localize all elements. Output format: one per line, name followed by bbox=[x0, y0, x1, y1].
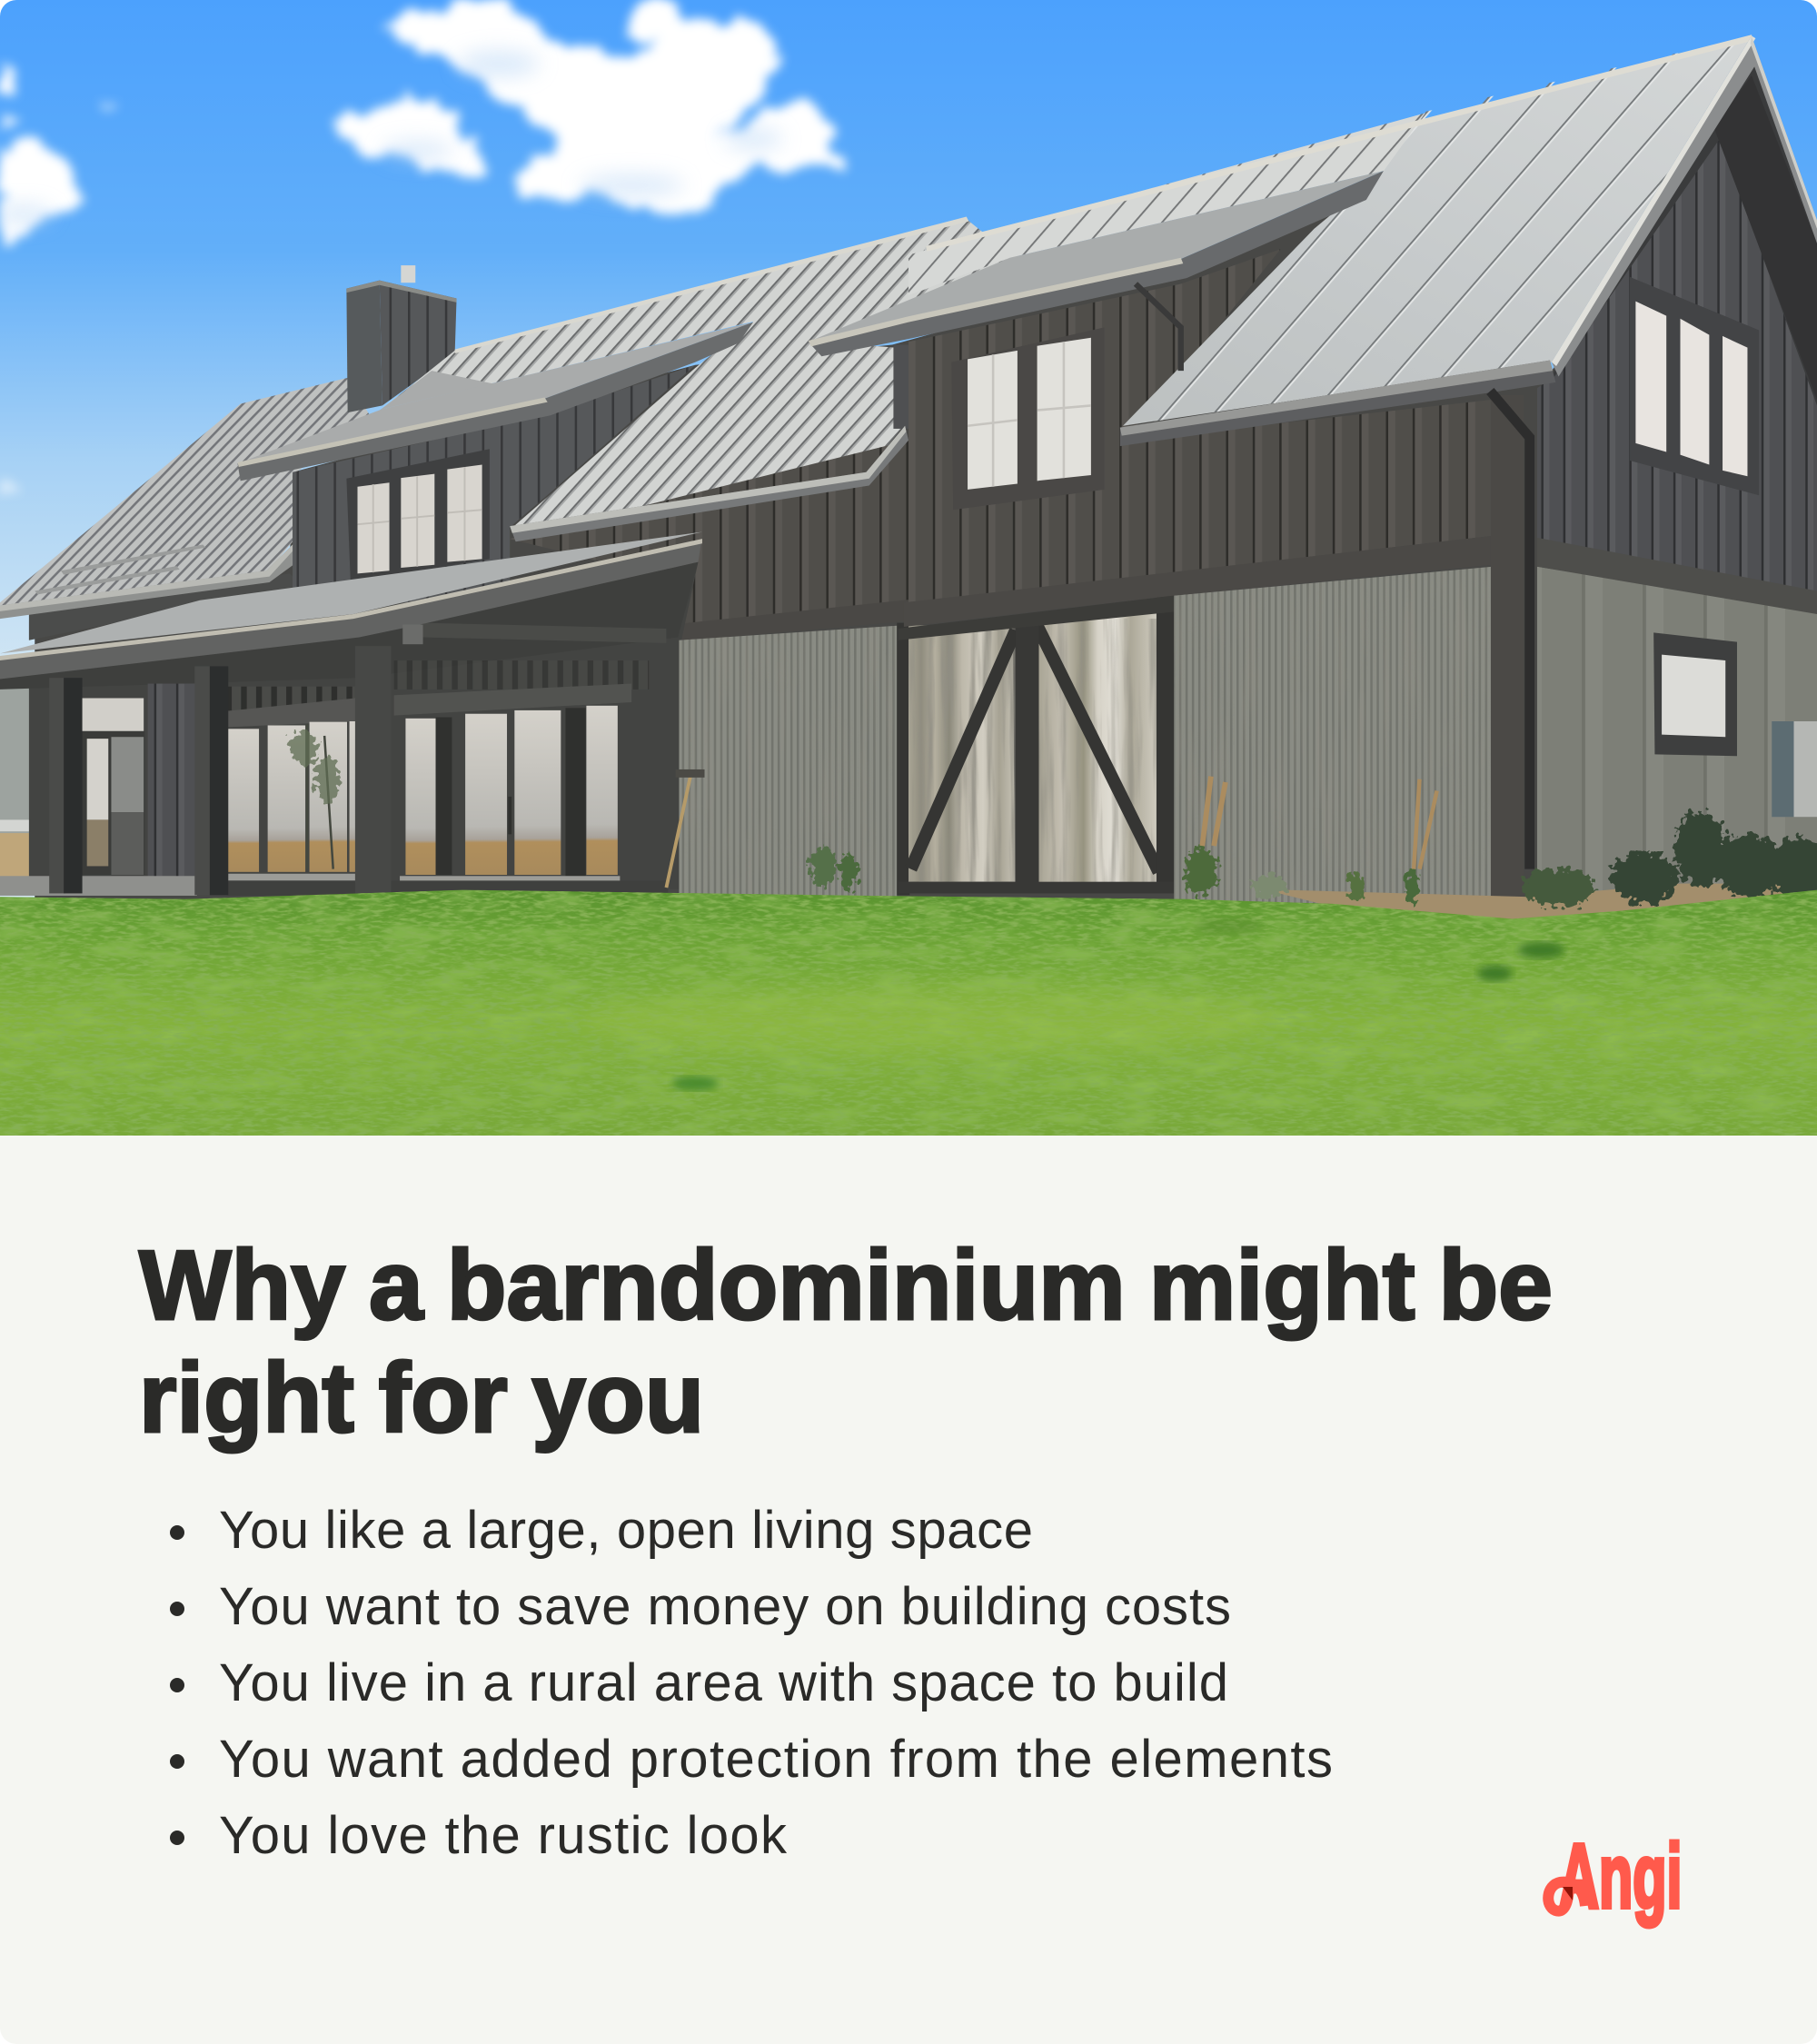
Angi logo: Angi bbox=[1559, 1825, 1682, 1927]
mulch bed bbox=[1263, 884, 1817, 927]
second dormer side wall bbox=[893, 344, 911, 429]
main striped roof bbox=[382, 219, 997, 527]
right lower wall bbox=[1537, 567, 1817, 938]
corner post bbox=[1491, 395, 1524, 922]
sky bbox=[0, 0, 1817, 1136]
bullet 3: You live in a rural area with space to build bbox=[219, 1653, 1228, 1712]
entry wall and door bbox=[81, 698, 144, 875]
reflected tree bbox=[291, 724, 340, 869]
first dormer windows bbox=[346, 449, 490, 582]
sliding glass doors, right set bbox=[405, 706, 618, 876]
large right roof bbox=[908, 35, 1753, 426]
heading bbox=[139, 1230, 1553, 1454]
second dormer windows bbox=[951, 327, 1105, 510]
bullet 2: You want to save money on building costs bbox=[219, 1577, 1231, 1636]
bullet 5: You love the rustic look bbox=[219, 1806, 788, 1865]
heading: right for you bbox=[139, 1343, 704, 1454]
horizontal belt beam bbox=[672, 600, 908, 642]
corrugated panel, left bbox=[679, 626, 897, 904]
porch fascia and roof bbox=[0, 531, 702, 679]
barn door post and wood panels bbox=[897, 596, 1174, 895]
bullet 1: You like a large, open living space bbox=[219, 1501, 1033, 1560]
lower right window bbox=[1653, 632, 1737, 756]
shrubs bbox=[1523, 811, 1817, 908]
bullet 4: You want added protection from the elements bbox=[219, 1730, 1333, 1789]
heading: Why a barndominium might be bbox=[139, 1230, 1553, 1341]
central upper wall bbox=[510, 441, 908, 625]
second dormer roof bbox=[809, 171, 1384, 356]
downspout bbox=[1490, 391, 1530, 869]
house backing silhouette bbox=[35, 116, 1817, 938]
far-left eave and wall bbox=[0, 536, 302, 640]
far-left hip roof bbox=[0, 378, 371, 605]
distant hazy hills bbox=[0, 684, 41, 879]
roof vents bbox=[35, 544, 205, 594]
second floor belt beam bbox=[904, 536, 1492, 627]
patio floor bbox=[0, 874, 668, 896]
roof gutter and downspout on dormer bbox=[1136, 283, 1181, 371]
upper wall of right section bbox=[908, 249, 1492, 602]
first dormer roof bbox=[237, 322, 753, 481]
photo: barndominium on a lawn under a blue sky bbox=[0, 0, 1817, 1136]
porch ceiling beams bbox=[228, 623, 666, 727]
porch columns bbox=[49, 646, 391, 902]
chimney bbox=[346, 265, 457, 412]
broom bbox=[666, 769, 705, 888]
gable barge board bbox=[1552, 36, 1817, 377]
gable wall bbox=[1537, 139, 1817, 609]
bullet list bbox=[170, 1501, 1333, 1865]
first dormer wall bbox=[293, 365, 695, 602]
porch interior bbox=[0, 562, 698, 889]
lawn bbox=[0, 880, 1817, 1136]
right roof eave bbox=[1120, 361, 1555, 446]
utility meter box bbox=[1772, 721, 1817, 817]
gable underside bbox=[1713, 75, 1817, 400]
clouds bbox=[0, 0, 841, 493]
corrugated panel, right bbox=[1174, 567, 1493, 916]
ridge cap bbox=[455, 217, 968, 353]
roof section behind second dormer bbox=[799, 255, 1019, 348]
right belt beam bbox=[1537, 538, 1817, 614]
central eave bbox=[510, 426, 908, 541]
board wall beside entry bbox=[148, 684, 197, 878]
gable backing bbox=[1547, 58, 1817, 417]
ornamental grasses bbox=[810, 777, 1437, 905]
gable windows bbox=[1630, 277, 1759, 495]
sliding glass doors, left set bbox=[228, 721, 355, 872]
